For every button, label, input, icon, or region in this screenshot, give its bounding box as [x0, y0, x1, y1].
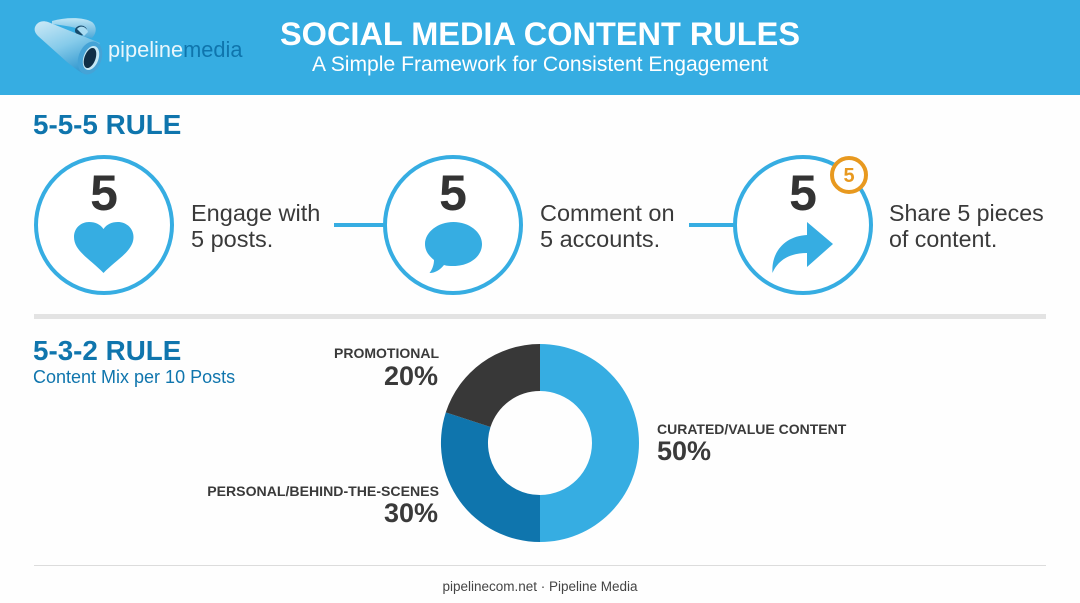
step: share — [735, 157, 1044, 293]
heading: 5-3-2 rule: 5-3-2 RULE — [33, 335, 181, 366]
icon: heart — [74, 222, 134, 273]
label: personal: 30% — [384, 498, 438, 528]
step text: Engage with — [191, 200, 320, 226]
label: personal — [207, 483, 439, 528]
step text: Comment on — [540, 200, 675, 226]
step text: 5 accounts. — [540, 226, 660, 252]
connector: first to second — [334, 223, 384, 227]
label: curated: CURATED/VALUE CONTENT — [657, 421, 847, 437]
icon: pipeline logo — [35, 18, 107, 78]
label: promotional: 20% — [384, 361, 438, 391]
badge — [832, 158, 866, 192]
label: promotional: PROMOTIONAL — [334, 345, 439, 361]
step text: of content. — [889, 226, 997, 252]
label: curated — [657, 421, 847, 466]
footer: pipelinecom.net · Pipeline Media — [442, 579, 638, 594]
icon: speech bubble — [425, 222, 482, 273]
step text: 5 posts. — [191, 226, 273, 252]
connector: second to third — [689, 223, 734, 227]
label: personal: PERSONAL/BEHIND-THE-SCENES — [207, 483, 439, 499]
header banner — [0, 0, 1080, 95]
step: engage — [36, 157, 320, 293]
number: 5 — [90, 165, 118, 221]
circle: comment — [385, 157, 521, 293]
circle: engage — [36, 157, 172, 293]
step: comment — [385, 157, 675, 293]
number: 5 — [789, 165, 817, 221]
heading: 5-5-5 rule: 5-5-5 RULE — [33, 109, 181, 140]
label: promotional — [334, 345, 439, 391]
badge: 5 — [843, 165, 855, 187]
donut chart — [441, 344, 639, 542]
title: SOCIAL MEDIA CONTENT RULES — [280, 16, 800, 52]
label: curated: 50% — [657, 436, 711, 466]
number: 5 — [439, 165, 467, 221]
subtitle: A Simple Framework for Consistent Engagement — [312, 53, 768, 76]
icon: share arrow — [772, 222, 833, 273]
step text: Share 5 pieces — [889, 200, 1044, 226]
subheading: Content Mix per 10 Posts — [33, 367, 235, 387]
circle: share — [735, 157, 871, 293]
logo wordmark: pipelinemedia — [108, 37, 243, 62]
